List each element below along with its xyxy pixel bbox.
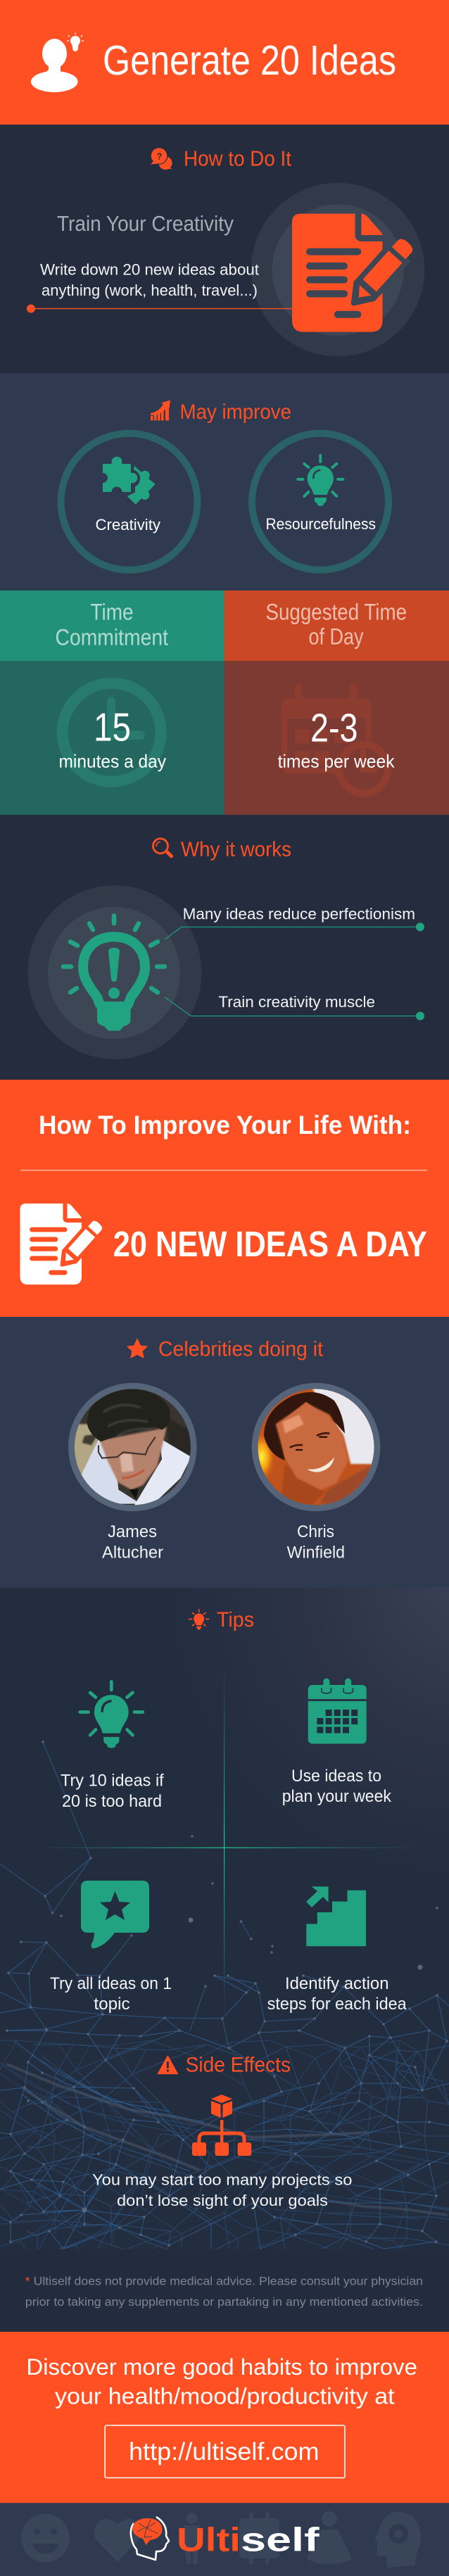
panel: footer with logo (0, 2503, 449, 2576)
text: plan your week: plan your week (282, 1787, 392, 1806)
title: Generate 20 Ideas (103, 37, 396, 84)
wordmark: Ulti (177, 2521, 241, 2558)
callout: many ideas reduce perfectionism: Many ideas reduce perfectionism (183, 905, 415, 923)
tip: plan your week (282, 1681, 392, 1806)
text: try 10 ideas: 20 is too hard (62, 1792, 162, 1811)
icon: growth chart (151, 400, 170, 421)
value: 2-3 times per week: 2-3 (310, 705, 358, 750)
panel: disclaimer (0, 2249, 449, 2332)
icon: document with pencil (251, 183, 424, 356)
icon: light bulb (298, 455, 343, 506)
names: celebrities: Winfield (287, 1543, 345, 1562)
value: 15 minutes a day (59, 705, 166, 771)
text: try 10 ideas: Try 10 ideas if (61, 1771, 164, 1791)
value: 2-3 times per week: times per week (278, 750, 396, 771)
text block: instruction (40, 260, 260, 299)
icon: question speech bubbles (151, 148, 172, 170)
icon: cube hierarchy (192, 2095, 251, 2156)
icon: light bulb with exclamation mark (28, 885, 201, 1059)
names: celebrities: James (108, 1522, 157, 1541)
text: plan your week (282, 1767, 392, 1806)
heading: how to do it: How to Do It (184, 147, 291, 171)
text: action steps (267, 1974, 407, 2014)
panel: how to do it (0, 125, 449, 373)
icon: calendar (308, 1681, 367, 1744)
heading: how to improve your life with: How To Improve Your Life With: (39, 1111, 411, 1139)
text: plan your week: Use ideas to (291, 1767, 381, 1786)
icon: warning triangle (158, 2056, 177, 2073)
text: medical disclaimer (25, 2275, 423, 2309)
button: website link (105, 2425, 345, 2477)
text: try 10 ideas (61, 1771, 164, 1811)
value: 15 minutes a day: 15 (94, 705, 131, 750)
button: website link: http://ultiself.com (129, 2438, 320, 2465)
heading: suggested time of day: of Day (308, 624, 363, 650)
panel: call to action (0, 2332, 449, 2503)
value: 2-3 times per week (278, 705, 396, 771)
icon: magnifier (153, 839, 172, 856)
text: all ideas on one topic: topic (94, 1995, 130, 2014)
logo: ultiself (131, 2517, 320, 2560)
benefit: resourcefulness (252, 434, 388, 570)
heading: side effects: Side Effects (186, 2054, 291, 2077)
icon: star (127, 1338, 148, 1358)
heading: time commitment: Commitment (55, 625, 168, 650)
label: creativity: Creativity (96, 516, 160, 533)
heading: suggested time of day (266, 600, 407, 650)
icon: tips bulb (189, 1610, 209, 1630)
names: celebrities (102, 1522, 345, 1562)
panel: may improve (0, 373, 449, 591)
heading: tips: Tips (217, 1608, 254, 1631)
logo: ultiself: self (241, 2521, 320, 2558)
names: celebrities: Altucher (102, 1543, 163, 1562)
text: medical disclaimer: * Ultiself does not provide medical advice. Please consult your physician (25, 2275, 423, 2288)
panel: time commitment (0, 591, 224, 815)
panel: tips and side effects background (0, 1588, 449, 2263)
text block: instruction: anything (work, health, travel...) (42, 282, 258, 299)
heading: time commitment (55, 600, 168, 650)
subheading: train your creativity: Train Your Creativity (57, 212, 234, 236)
text block: instruction: Write down 20 new ideas about (40, 260, 260, 279)
text: discover more good habits (26, 2354, 417, 2408)
text: medical disclaimer: prior to taking any supplements or partaking in any mentioned activities. (25, 2296, 423, 2309)
text: side effect: don’t lose sight of your goals (117, 2192, 328, 2209)
icon: person with light bulb (31, 32, 84, 92)
portrait: james altucher (68, 1383, 197, 1511)
portrait: chris winfield (248, 1383, 380, 1511)
faded background icons (21, 2511, 421, 2568)
tip: action steps (267, 1886, 407, 2014)
text: action steps: Identify action (285, 1974, 388, 1993)
panel: suggested time of day (224, 591, 449, 815)
text: all ideas on one topic: Try all ideas on 1 (50, 1974, 172, 1993)
heading: why it works: Why it works (181, 838, 291, 861)
value: 15 minutes a day: minutes a day (59, 750, 166, 771)
icon: question speech bubbles: ? (156, 151, 162, 162)
names: celebrities: Chris (297, 1522, 334, 1541)
heading: suggested time of day: Suggested Time (266, 600, 407, 625)
icon: puzzle pieces (103, 457, 156, 505)
heading: time commitment: Time (90, 600, 134, 625)
panel: title header (0, 0, 449, 125)
text: action steps: steps for each idea (267, 1995, 407, 2014)
icon: stairs with arrow (306, 1886, 366, 1946)
panel: how to improve your life banner (0, 1080, 449, 1317)
text: discover more good habits: your health/mood/productivity at (55, 2383, 395, 2408)
tip: all ideas on one topic (50, 1881, 172, 2014)
icon: background calendar and clock (282, 688, 388, 793)
heading: may improve: May improve (180, 400, 291, 424)
icon: light bulb (80, 1681, 143, 1748)
label: resourcefulness: Resourcefulness (266, 515, 376, 533)
callout line with dot (27, 304, 292, 312)
callout: many ideas reduce perfectionism (165, 905, 424, 940)
icon: brain in head (131, 2517, 169, 2560)
text: all ideas on one topic (50, 1974, 172, 2014)
icon: speech bubble with star (81, 1881, 149, 1948)
icon: white document with pencil (20, 1204, 105, 1284)
heading: celebrities doing it: Celebrities doing it (158, 1338, 324, 1361)
text: side effect: You may start too many projects so (92, 2171, 352, 2189)
benefit: creativity (61, 434, 197, 570)
tip: try 10 ideas (61, 1681, 164, 1811)
callout: train creativity muscle (165, 993, 424, 1021)
callout: train creativity muscle: Train creativity muscle (218, 993, 375, 1011)
icon: background clock (63, 683, 161, 782)
text: discover more good habits: Discover more good habits to improve (26, 2354, 417, 2380)
text: side effect (92, 2171, 352, 2209)
panel: why it works (0, 815, 449, 1080)
panel: celebrities doing it (0, 1317, 449, 1588)
